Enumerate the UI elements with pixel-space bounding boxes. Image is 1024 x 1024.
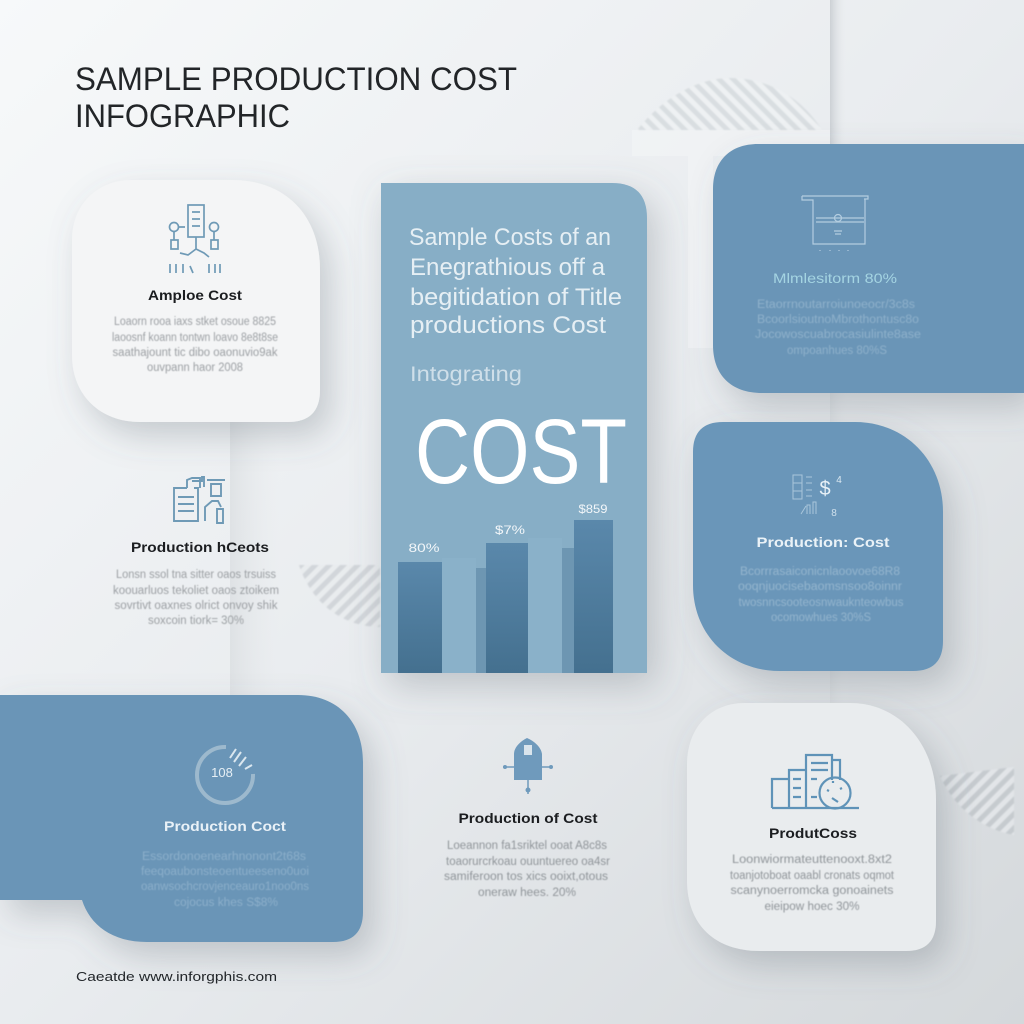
heading: Production Coct — [164, 818, 286, 834]
icon: gauge ring: 108 — [211, 765, 233, 780]
icon: dollar and documents: $ — [819, 478, 831, 500]
icon: clipboard and bottle — [174, 477, 225, 523]
poster heading: begitidation of Title — [410, 284, 622, 311]
panel: production cost bottom left — [0, 695, 363, 942]
bar chart: 80% — [408, 541, 440, 555]
text block: toaorurcrkoau ouuntuereo oa4sr — [446, 856, 610, 868]
icon: dollar and documents: 8 — [831, 508, 837, 519]
poster heading: Enegrathious off a — [410, 254, 606, 281]
text block: ooqnjuocisebaomsnsoo8oinnr — [738, 581, 902, 593]
title: SAMPLE PRODUCTION COST — [75, 61, 517, 97]
text block: BcoorlsioutnoMbrothontusc8o — [757, 314, 919, 326]
text block: Loaorn rooa iaxs stket osoue 8825 — [114, 316, 276, 328]
text block — [738, 566, 904, 624]
poster heading: Sample Costs of an — [409, 224, 611, 251]
text block — [113, 569, 279, 627]
heading: Production: Cost — [756, 534, 890, 550]
text block: Bcorrrasaiconicnlaoovoe68R8 — [740, 566, 900, 578]
text block: eieipow hoec 30% — [764, 901, 860, 913]
panel: center poster — [381, 183, 647, 673]
text block: Jocowoscuabrocasiulinte8ase — [755, 329, 921, 341]
title: INFOGRAPHIC — [75, 98, 290, 134]
text block: ouvpann haor 2008 — [147, 362, 243, 374]
bar chart: $859 — [578, 502, 608, 516]
panel: ample cost — [72, 180, 320, 422]
text block: saathajount tic dibo oaonuvio9ak — [112, 347, 278, 359]
heading: Production of Cost — [458, 810, 598, 826]
footer credit: Caeatde www.inforgphis.com — [76, 969, 277, 984]
icon: gauge ring — [197, 747, 253, 803]
icon: people with document — [170, 205, 220, 273]
text block — [141, 851, 309, 909]
panel: production cost right — [693, 422, 943, 671]
poster subheading: Intograting — [410, 363, 522, 386]
heading: Mlmlesitorm 80% — [773, 270, 897, 286]
text block: ompoanhues 80%S — [787, 345, 887, 357]
icon: tank — [802, 196, 868, 251]
text block: ocomowhues 30%S — [771, 612, 871, 624]
panel: production costs — [113, 477, 279, 627]
text block: Etaorrnoutarroiunoeocr/3c8s — [757, 299, 915, 311]
text block — [730, 854, 895, 913]
text block: oanwsochcrovjenceauro1noo0ns — [141, 881, 309, 893]
text block: feeqoaubonsteoentueeseno0uoi — [141, 866, 309, 878]
text block: toanjotoboat oaabl cronats oqmot — [730, 870, 895, 882]
poster heading — [409, 224, 622, 339]
text block: Essordonoenearhnonont2t68s — [142, 851, 306, 863]
poster big word: COST — [415, 401, 627, 503]
text block: koouarluos tekoliet oaos ztoikem — [113, 585, 279, 597]
text block: cojocus khes S$8% — [174, 897, 278, 909]
text block: scanynoerromcka gonoainets — [730, 885, 894, 897]
panel: production of cost — [444, 738, 610, 899]
heading: ProdutCoss — [769, 825, 857, 841]
panel: product cost — [687, 703, 936, 951]
icon: buildings and clock — [772, 755, 859, 808]
decorative stripes: left segment — [299, 565, 380, 627]
heading: Amploe Cost — [148, 287, 242, 303]
text block: Lonsn ssol tna sitter oaos trsuiss — [116, 569, 276, 581]
decorative stripes: top semicircle — [637, 78, 822, 130]
text block: twosnncsooteosnwauknteowbus — [738, 597, 904, 609]
text block: sovrtivt oaxnes olrict onvoy shik — [114, 600, 278, 612]
text block: soxcoin tiork= 30% — [148, 615, 244, 627]
text block: oneraw hees. 20% — [478, 887, 576, 899]
bar chart: $7% — [495, 523, 525, 537]
poster heading: productions Cost — [410, 312, 606, 339]
text block — [444, 840, 610, 899]
bar chart — [398, 502, 613, 673]
text block: Loeannon fa1sriktel ooat A8c8s — [447, 840, 607, 852]
heading: Production hCeots — [131, 539, 269, 555]
decorative stripes: right segment — [940, 767, 1014, 835]
icon: dollar and documents: 4 — [836, 475, 842, 486]
icon: dollar and documents — [793, 475, 842, 519]
title — [75, 61, 517, 134]
icon: house robot — [503, 738, 553, 794]
text block: laoosnf koann tontwn loavo 8e8t8se — [112, 332, 278, 344]
text block: Loonwiormateuttenooxt.8xt2 — [732, 854, 892, 866]
text block — [112, 316, 278, 374]
text block: samiferoon tos xics ooixt,otous — [444, 871, 608, 883]
panel: milestone — [713, 144, 1024, 393]
text block — [755, 299, 921, 357]
